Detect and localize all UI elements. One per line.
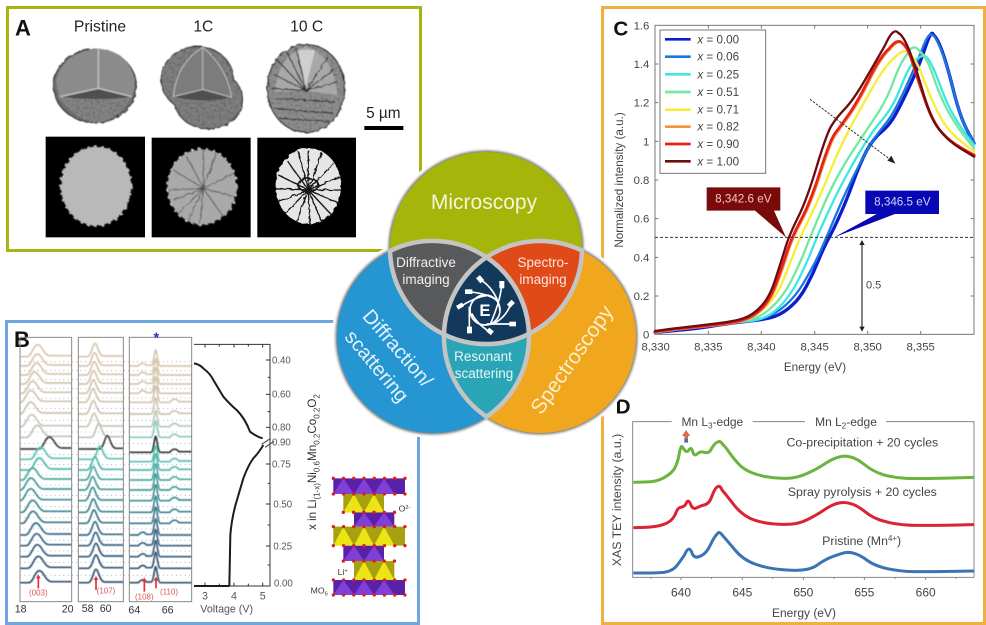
axis label: composition: 0.6 [312, 460, 321, 472]
legend [660, 30, 766, 173]
label: Diffraction/ scattering: Diffraction/ [358, 306, 437, 392]
crystal labels [311, 504, 411, 598]
heading: D: D [616, 395, 631, 418]
chart: voltage profile: 0.00 [274, 579, 293, 590]
y-axis label: XAS TEY intensity (a.u.) [610, 434, 624, 566]
trend arrow [810, 99, 895, 164]
label: Microscopy: Microscopy [431, 191, 538, 214]
label: Diffraction/ scattering [340, 306, 437, 407]
x-axis tick labels: 64 [128, 604, 140, 616]
venn soft shadow [336, 150, 638, 434]
dashed threshold line [655, 236, 974, 239]
x-axis label: Energy (eV) [772, 606, 836, 620]
double arrow: 0.5: 0.5 [866, 280, 881, 292]
curve labels: 4+ [888, 534, 897, 543]
axis label: composition: Co [306, 419, 319, 434]
heading: C: C [613, 17, 628, 40]
plot frame and ticks [633, 422, 974, 577]
x-axis tick labels: 660 [916, 586, 936, 600]
chart frames [20, 337, 192, 602]
panel B: diffraction data [0, 322, 418, 624]
edge labels: 2 [842, 421, 847, 430]
label: Spectro-imaging: imaging [519, 272, 567, 287]
label: 1C: 1C [193, 19, 213, 36]
x-axis tick labels: 66 [162, 604, 174, 616]
region: centre [444, 257, 529, 344]
dotted guide traces [20, 362, 192, 575]
label: Resonant scattering [454, 349, 513, 381]
image: 10C cross-section [257, 138, 356, 237]
crystal labels: 6 [325, 592, 328, 598]
axis label: composition: 0.2 [312, 407, 321, 419]
y-axis tick labels [634, 20, 649, 341]
x-axis tick labels: 60 [100, 603, 112, 615]
label: Diffractive imaging: imaging [402, 272, 450, 287]
chart: voltage profile: 4 [231, 590, 237, 602]
y-axis label: Normalized intensity (a.u.) [613, 112, 626, 248]
y-axis tick labels: 0 [643, 329, 649, 341]
legend: x = 1.00 [696, 155, 740, 168]
heading: B: B [14, 327, 30, 352]
scale bar: 5 µm [364, 105, 403, 130]
icon: E beamlines: E [479, 301, 491, 320]
curve labels: Pristine (Mn [822, 534, 888, 548]
edge labels [681, 415, 877, 430]
y-axis tick labels: 0.6 [634, 214, 649, 226]
x-axis tick labels: 8,335 [694, 341, 723, 353]
x-axis tick labels: 58 [82, 603, 94, 615]
image: pristine cross-section [46, 137, 145, 237]
edge labels: -edge [713, 415, 744, 429]
plot frame and ticks [655, 25, 974, 334]
curve: co-precipitation [633, 441, 974, 482]
y-axis tick labels: 1.2 [634, 98, 649, 110]
circle: spectroscopy [444, 241, 636, 433]
label: Spectro-imaging: Spectro- [517, 255, 569, 270]
legend: x = 0.90 [696, 138, 740, 151]
chart: voltage profile: Voltage (V) [200, 604, 253, 616]
x-axis tick labels: 8,345 [800, 341, 829, 353]
chart: voltage profile: 3 [202, 590, 208, 602]
x-axis tick labels: 8,355 [906, 341, 935, 353]
double arrow: 0.5 [859, 240, 881, 332]
label: Pristine: Pristine [74, 19, 126, 36]
legend: x = 0.51 [696, 86, 739, 99]
curve labels: Co-precipitation + 20 cycles [786, 436, 938, 450]
panel C: XANES chart [613, 17, 975, 374]
chart: (108)/(110) peak traces [130, 348, 192, 584]
legend: x = 0.00 [696, 33, 740, 46]
region: resonant scattering [444, 334, 529, 417]
edge labels: Mn L [681, 415, 708, 429]
x-axis tick labels [671, 586, 936, 600]
peak arrows and labels: (107) [97, 587, 116, 596]
x-axis tick labels: 655 [854, 586, 875, 600]
crystal labels: Li [338, 567, 344, 577]
callout: 8,342.6 eV: 8,342.6 eV [715, 192, 772, 205]
y-axis tick labels: 1.4 [634, 59, 649, 71]
region: diffractive imaging [390, 241, 486, 334]
panel D: XAS chart [610, 395, 974, 620]
particle: 1C 3D section [161, 47, 242, 129]
axis label: composition: Mn [306, 445, 319, 461]
edge labels: 3 [708, 421, 713, 430]
label: Spectroscopy: Spectroscopy [526, 301, 618, 419]
x-axis tick labels: 20 [62, 604, 74, 616]
chart: voltage profile: 0.75 [272, 459, 291, 470]
label: 10 C: 10 C [290, 19, 323, 36]
peak arrows and labels: (108) [135, 592, 154, 601]
venn diagram [332, 147, 641, 438]
axis label: composition: (1-x) [312, 483, 321, 500]
x-axis tick labels: 8,350 [853, 341, 882, 353]
x-axis tick labels [641, 341, 935, 353]
legend: x = 0.82 [696, 121, 739, 134]
x-axis tick labels: 645 [732, 586, 753, 600]
x-axis tick labels: 650 [793, 586, 814, 600]
label: Diffraction/ scattering: scattering [340, 326, 413, 407]
marker: blue star: * [153, 330, 159, 346]
crystal structure [333, 478, 407, 595]
y-axis tick labels: 1.6 [634, 20, 649, 32]
chart: voltage profile: 0.25 [273, 541, 292, 552]
chart: voltage profile: 0.60 [272, 390, 291, 401]
chart: voltage profile: 0.40 [272, 355, 291, 366]
y-axis tick labels: 1 [643, 136, 649, 148]
x-axis tick labels [15, 603, 174, 616]
crystal labels: MO [311, 585, 325, 595]
chart: (003) peak traces [20, 343, 72, 584]
axis label: composition: x in Li [306, 500, 319, 530]
legend: x = 0.25 [696, 68, 739, 81]
x-axis tick labels: 8,330 [641, 341, 670, 353]
peak arrows and labels: (110) [160, 587, 178, 596]
curve labels: Spray pyrolysis + 20 cycles [788, 485, 937, 499]
label: Diffractive imaging [396, 255, 456, 287]
chart: voltage profile: 5 [260, 590, 266, 602]
edge labels: Mn L [815, 415, 842, 429]
circle: microscopy [390, 152, 582, 344]
image: 1C cross-section [152, 138, 251, 237]
y-axis tick labels: 0.2 [634, 291, 649, 303]
tick marks [651, 577, 956, 580]
callout: 8,342.6 eV [707, 187, 786, 237]
x-axis label: Energy (eV) [784, 361, 846, 374]
label: Resonant scattering: scattering [455, 366, 513, 381]
circle: diffraction/scattering [337, 241, 529, 433]
label: Diffractive imaging: Diffractive [396, 255, 456, 270]
curve labels [786, 436, 938, 548]
particle: pristine 3D section [54, 49, 136, 123]
heading: A: A [15, 15, 31, 40]
x-axis tick labels: 18 [15, 604, 27, 616]
y-axis tick labels: 0.4 [634, 252, 649, 264]
curve labels: ) [897, 534, 901, 548]
label: Spectro-imaging [517, 255, 569, 287]
chart: voltage profile: 0.90 [272, 437, 291, 448]
marker arrow [682, 430, 690, 443]
chart: voltage profile: 0.50 [273, 499, 292, 510]
x-axis tick labels: 640 [671, 586, 691, 600]
callout: 8,346.5 eV: 8,346.5 eV [874, 196, 931, 209]
y-axis tick labels: 0.8 [634, 175, 649, 187]
legend: x = 0.71 [696, 104, 739, 117]
panel A: microscopy images [8, 8, 420, 250]
label: Resonant scattering: Resonant [454, 349, 512, 364]
spectra curves [655, 31, 975, 332]
scale bar: 5 µm: 5 µm [366, 105, 401, 122]
chart: voltage profile: 0.80 [272, 423, 291, 434]
chart: (107) peak traces [78, 342, 123, 584]
icon: E beamlines [456, 275, 516, 335]
crystal labels: O [399, 504, 405, 514]
crystal labels: 2- [405, 505, 411, 511]
venn halo [332, 147, 641, 438]
callout: 8,346.5 eV [834, 191, 939, 237]
axis label: composition: O [306, 399, 319, 408]
panel C/D frame [602, 8, 984, 624]
legend: x = 0.06 [696, 51, 739, 64]
curve: spray pyrolysis [633, 486, 974, 528]
region: spectro-imaging [486, 241, 582, 334]
edge labels: -edge [846, 415, 877, 429]
axis label: composition: Ni [306, 472, 319, 483]
peak arrows and labels: (003) [29, 589, 48, 598]
peak arrows and labels [29, 574, 178, 601]
crystal labels: + [344, 568, 348, 574]
x-axis tick labels: 8,340 [747, 341, 776, 353]
particle: 10C 3D section [267, 44, 345, 132]
chart: voltage profile [194, 344, 293, 616]
axis label: composition: 0.2 [312, 433, 321, 445]
curve: pristine [633, 533, 974, 573]
axis label: composition: 2 [312, 394, 321, 399]
